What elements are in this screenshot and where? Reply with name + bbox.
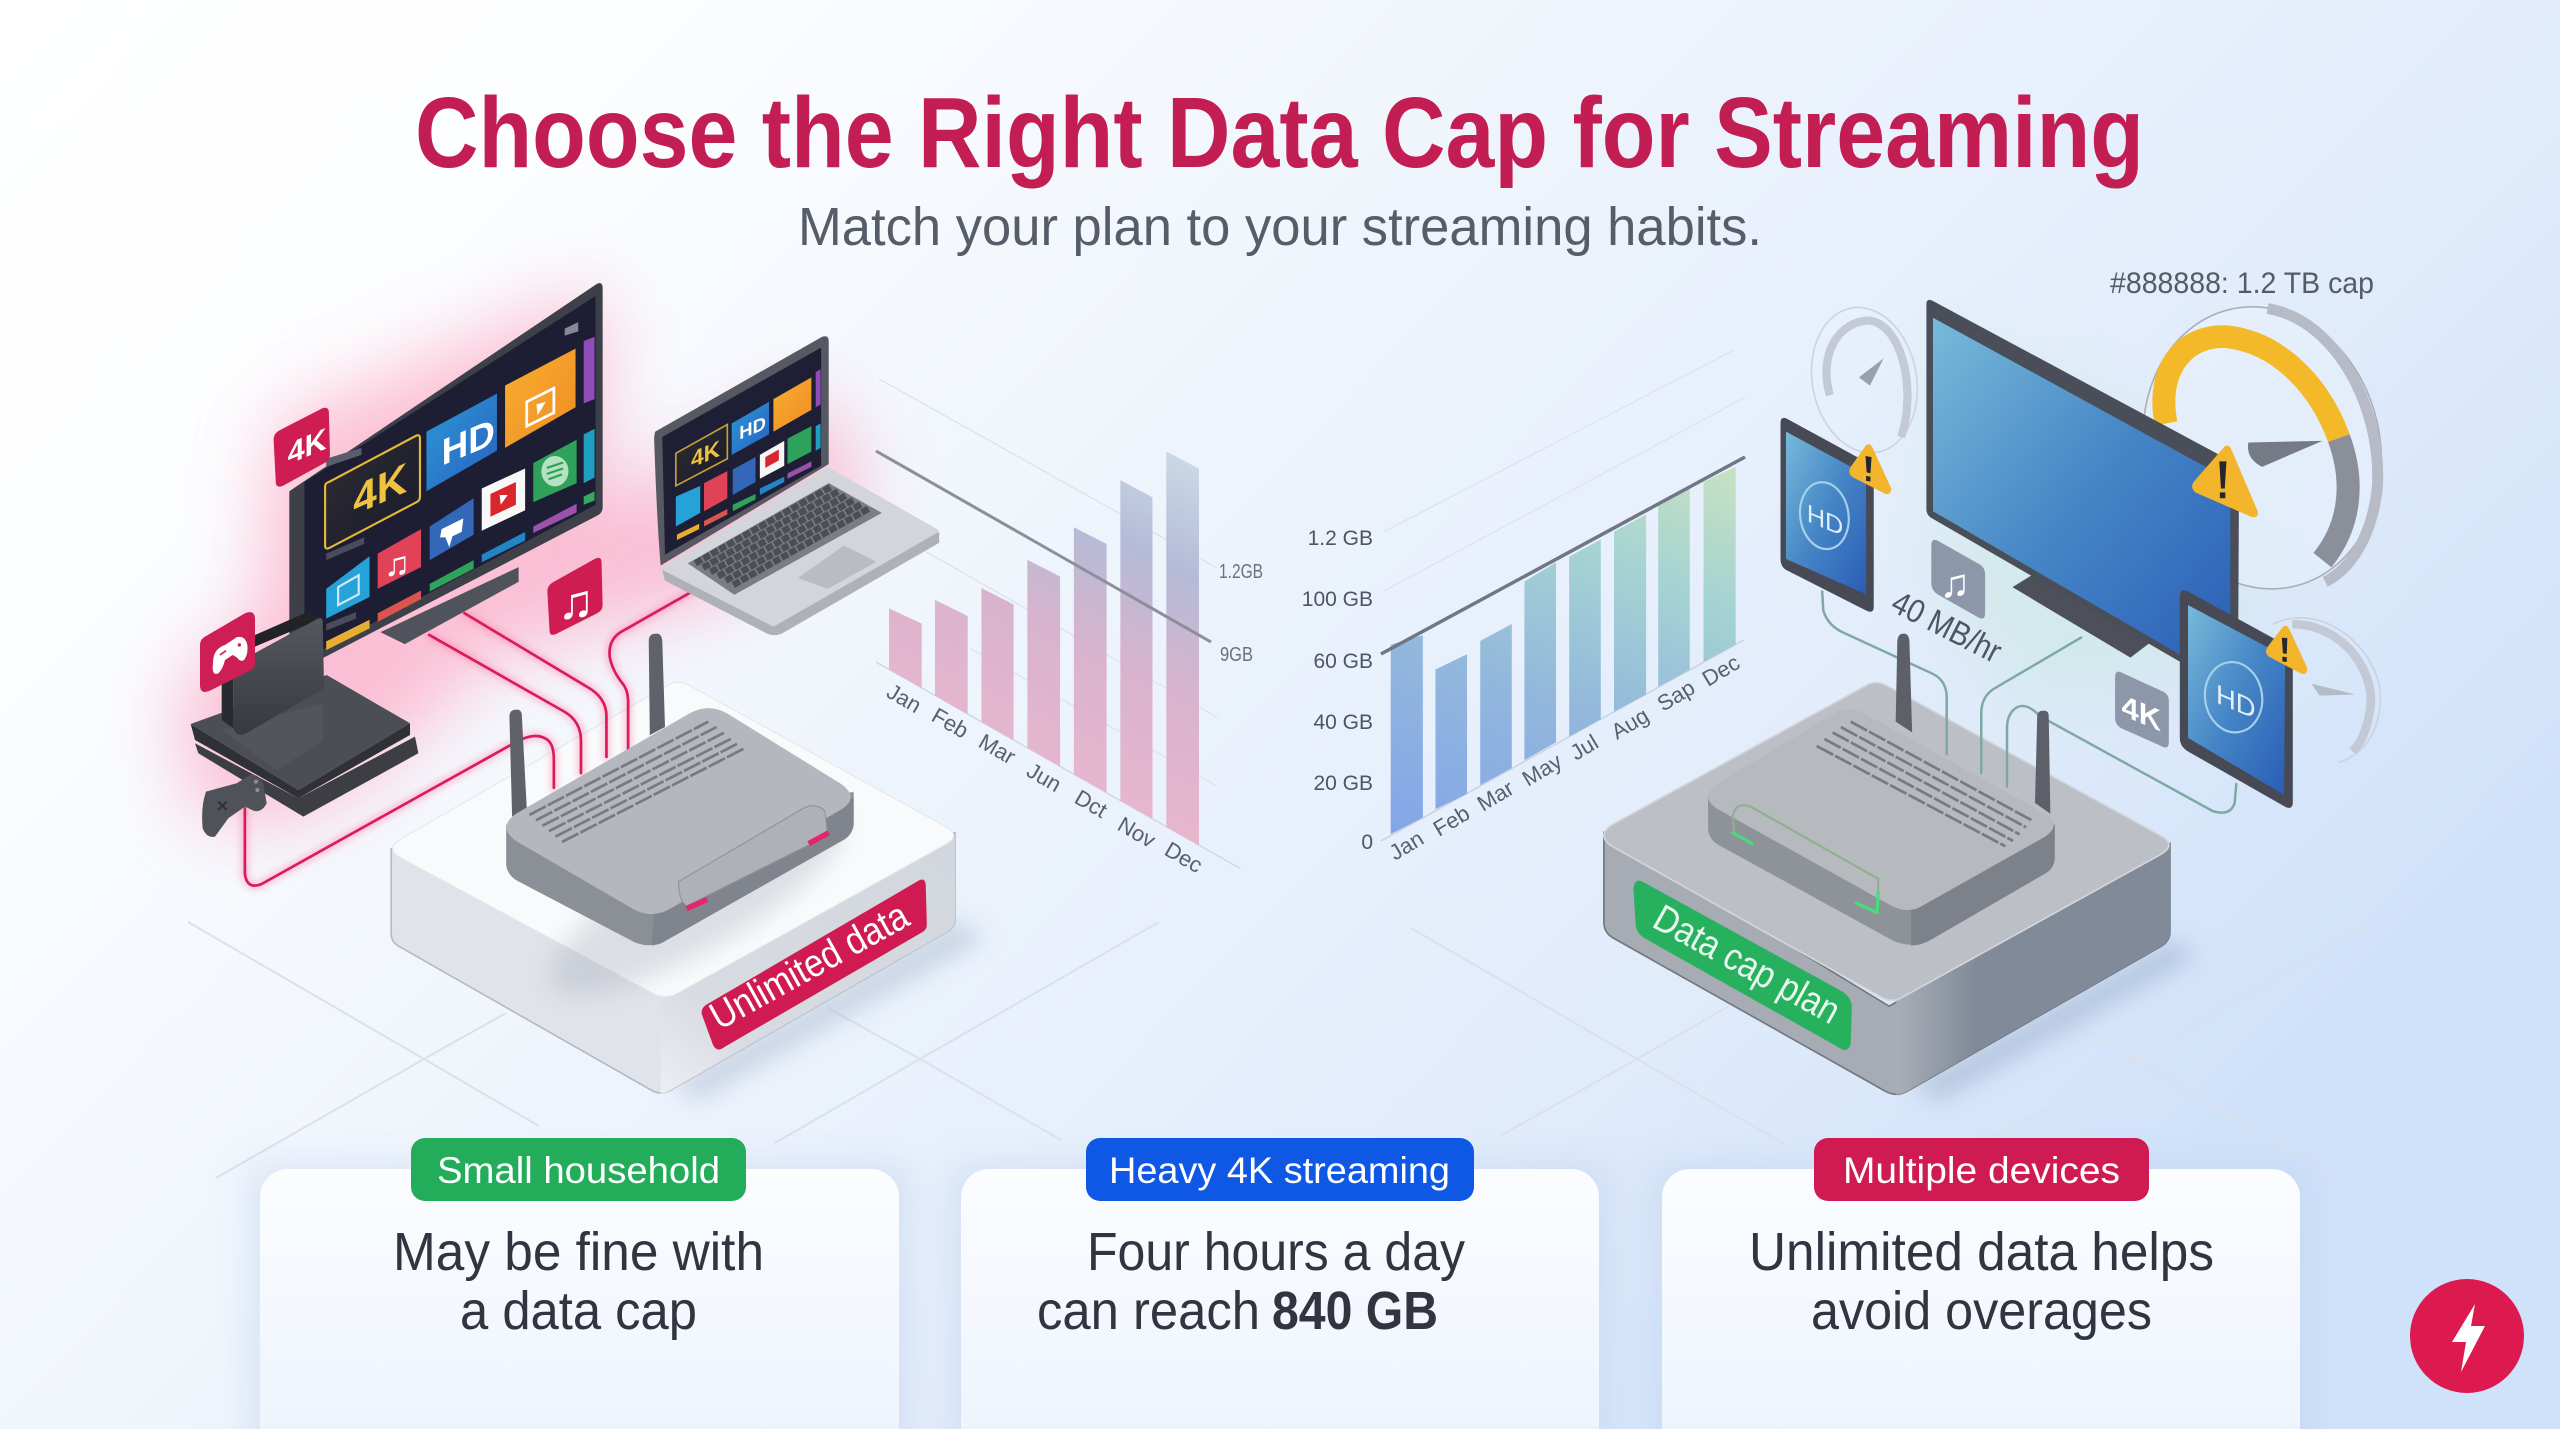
y axis labels bbox=[1302, 527, 1373, 854]
router bbox=[1708, 634, 2055, 946]
y axis labels: 20 GB bbox=[1313, 772, 1373, 795]
router bbox=[506, 634, 867, 1027]
month labels: Mar bbox=[1473, 775, 1518, 816]
laptop screen tiles bbox=[676, 369, 821, 540]
router vents bbox=[529, 722, 744, 842]
month labels: Jul bbox=[1566, 729, 1603, 765]
icon: gamepad badge bbox=[200, 612, 255, 692]
card text: 840 GB bbox=[1272, 1281, 1438, 1341]
router LEDs bbox=[687, 833, 829, 909]
card text bbox=[1749, 1222, 2214, 1341]
warning icon right bbox=[2266, 626, 2307, 674]
card text bbox=[1037, 1222, 1465, 1341]
value labels: 9GB bbox=[1220, 644, 1253, 666]
month labels bbox=[882, 679, 1207, 878]
y axis labels: 100 GB bbox=[1302, 588, 1373, 611]
green LEDs bbox=[1733, 805, 1878, 912]
wires bbox=[1822, 592, 2236, 813]
chart lines bbox=[876, 379, 1240, 869]
cap line bbox=[876, 451, 1211, 642]
icon: music tile: ♫ bbox=[1940, 560, 1970, 606]
card panel bbox=[1662, 1169, 2300, 1429]
month labels: Feb bbox=[1429, 800, 1474, 841]
card shadows bbox=[250, 1165, 2310, 1429]
pink glow bbox=[177, 288, 871, 825]
pill bbox=[411, 1138, 746, 1201]
month labels bbox=[1385, 650, 1744, 865]
label: unlimited data: Unlimited data bbox=[703, 894, 916, 1038]
right tablet bbox=[2180, 590, 2293, 808]
card panel bbox=[961, 1169, 1599, 1429]
month labels: Aug bbox=[1607, 703, 1653, 744]
icon: lightning badge bbox=[2410, 1279, 2524, 1393]
card: small household bbox=[260, 1138, 899, 1429]
card: heavy 4K streaming bbox=[961, 1138, 1599, 1429]
month labels: Sap bbox=[1653, 675, 1699, 716]
laptop screen tiles: HD bbox=[739, 413, 766, 445]
month labels: Jan bbox=[882, 679, 926, 718]
left scene: unlimited data bbox=[177, 283, 985, 1101]
subtitle: Match your plan to your streaming habits. bbox=[798, 197, 1762, 257]
router vents bbox=[1817, 722, 2032, 846]
right bar chart bbox=[1302, 350, 1745, 865]
pink wires bbox=[245, 592, 692, 886]
screen tiles: 4K bbox=[353, 454, 407, 525]
chart lines bbox=[1381, 350, 1744, 841]
value labels: 1.2GB bbox=[1219, 561, 1263, 583]
card panel bbox=[260, 1169, 899, 1429]
pill bbox=[1086, 1138, 1474, 1201]
card: multiple devices bbox=[1662, 1138, 2300, 1429]
keyboard keys bbox=[695, 487, 869, 585]
small gauge bottom bbox=[2273, 618, 2380, 762]
icon: music tile bbox=[1931, 540, 1985, 619]
pill text: Heavy 4K streaming bbox=[1109, 1150, 1450, 1191]
month labels: Dec bbox=[1160, 837, 1207, 878]
cap note: #888888: 1.2 TB cap bbox=[2110, 267, 2374, 300]
card text: avoid overages bbox=[1811, 1281, 2152, 1341]
pill text: Small household bbox=[437, 1150, 720, 1191]
month labels: Mar bbox=[974, 729, 1020, 769]
left bar chart bbox=[876, 379, 1263, 878]
cap line bbox=[1381, 457, 1745, 654]
month labels: Jun bbox=[1022, 758, 1066, 797]
warning icon large bbox=[2192, 446, 2258, 517]
pill text: Multiple devices bbox=[1843, 1150, 2120, 1191]
month labels: May bbox=[1518, 748, 1566, 791]
bars bbox=[1391, 467, 1736, 834]
small gauge top bbox=[1800, 299, 1929, 461]
y axis labels: 1.2 GB bbox=[1308, 527, 1373, 550]
card text: Unlimited data helps bbox=[1749, 1222, 2214, 1282]
screen tiles: ♫ bbox=[384, 545, 410, 583]
icon: music badge: ♫ bbox=[558, 576, 594, 630]
gray pedestal bbox=[1604, 683, 2199, 1101]
month labels: Jan bbox=[1385, 826, 1428, 865]
icon: 4K tile: 4K bbox=[2122, 687, 2161, 738]
pill bbox=[1814, 1138, 2149, 1201]
month labels: Dct bbox=[1070, 785, 1112, 823]
big gauge bbox=[2117, 285, 2407, 611]
screen tiles: HD bbox=[442, 411, 495, 474]
card text bbox=[393, 1222, 764, 1341]
white pedestal bbox=[391, 682, 985, 1101]
card text: a data cap bbox=[460, 1281, 697, 1341]
icon: 4K badge: 4K bbox=[288, 421, 327, 471]
icon: 4K tile bbox=[2115, 672, 2169, 748]
right scene: data cap plan bbox=[1604, 285, 2407, 1101]
icon: 4K badge bbox=[274, 408, 330, 487]
bars bbox=[889, 451, 1199, 846]
y axis labels: 40 GB bbox=[1313, 711, 1373, 734]
y axis labels: 0 bbox=[1361, 831, 1373, 854]
icon: game controller bbox=[202, 775, 267, 837]
laptop bbox=[654, 336, 940, 635]
big TV bbox=[289, 283, 603, 676]
laptop screen tiles: 4K bbox=[691, 436, 720, 474]
left tablet bbox=[1780, 418, 1874, 612]
floor grid lines bbox=[188, 922, 2373, 1180]
card text: Four hours a day bbox=[1087, 1222, 1465, 1282]
usage rate label: 40 MB/hr bbox=[1886, 583, 2008, 670]
card text: May be fine with bbox=[393, 1222, 764, 1282]
warning icon left bbox=[1849, 444, 1891, 494]
left tablet: HD bbox=[1807, 498, 1843, 542]
month labels: Dec bbox=[1698, 650, 1744, 691]
icon: music badge bbox=[547, 558, 603, 635]
right tablet: HD bbox=[2216, 679, 2256, 726]
antennas bbox=[1896, 634, 2050, 814]
month labels: Nov bbox=[1114, 812, 1160, 853]
value labels bbox=[1219, 561, 1263, 666]
title: Choose the Right Data Cap for Streaming bbox=[415, 77, 2144, 189]
game console bbox=[191, 612, 418, 837]
y axis labels: 60 GB bbox=[1313, 650, 1373, 673]
teal glow bbox=[1944, 331, 2235, 711]
month labels: Feb bbox=[928, 703, 973, 743]
screen tiles bbox=[325, 322, 595, 650]
label: data cap plan: Data cap plan bbox=[1646, 896, 1847, 1033]
big monitor bbox=[1926, 300, 2239, 692]
card text: can reach bbox=[1037, 1281, 1260, 1341]
